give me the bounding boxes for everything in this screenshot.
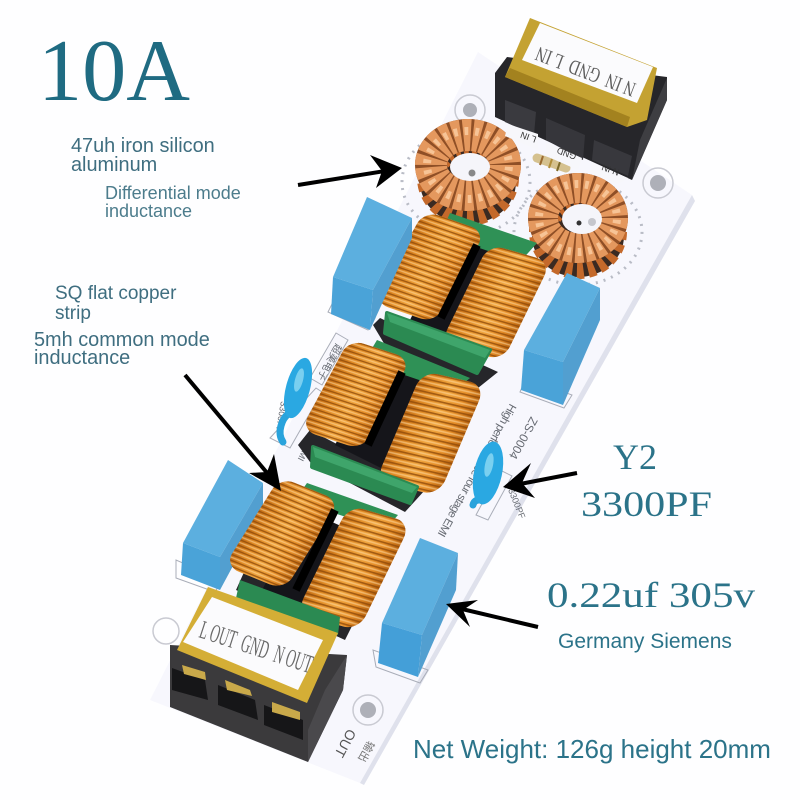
label: flat copper strip	[55, 283, 177, 324]
resistor	[537, 156, 566, 171]
label: Y2 3300PF: 3300PF	[581, 484, 712, 524]
label: iron silicon aluminum: aluminum	[71, 154, 157, 176]
Y2 capacitor: left	[278, 355, 318, 442]
label: weight and height: Net Weight: 126g height 20mm	[413, 734, 771, 764]
terminal label text	[519, 130, 621, 178]
printed outlines	[176, 302, 572, 683]
bottom terminal block	[170, 587, 347, 762]
board print text: ZS-0004	[506, 415, 541, 462]
label: flat copper strip: SQ flat copper	[55, 283, 177, 304]
label: brand: Germany Siemens	[558, 630, 732, 653]
terminal labels	[505, 124, 628, 184]
board print text: 3300PF	[506, 487, 527, 520]
label text: N IN GND L IN	[532, 42, 639, 102]
cover label	[522, 23, 653, 103]
inductor stage: bottom pair	[224, 477, 411, 640]
label: iron silicon aluminum: 47uh iron silicon	[71, 135, 215, 157]
label: Y2 3300PF	[581, 437, 712, 524]
cover label	[183, 597, 323, 690]
circuit board	[150, 52, 695, 785]
blue capacitor: lower left	[181, 460, 263, 590]
label text: L OUT GND N OUT	[196, 615, 316, 679]
arrow: to toroid	[298, 155, 402, 188]
toroid inductor: rear right	[514, 179, 642, 285]
toroid inductor: front left	[402, 129, 530, 235]
label: common mode inductance: 5mh common mode	[34, 329, 210, 351]
terminal label text: GND	[555, 145, 578, 162]
label: differential mode inductance: inductance	[105, 201, 192, 221]
terminal cover	[505, 18, 657, 127]
Y2 capacitor: right	[468, 439, 508, 507]
label: Y2 3300PF: Y2	[613, 437, 657, 477]
board print text: 超美电子	[315, 342, 345, 383]
arrow: to film capacitor	[446, 600, 538, 627]
arrow: to common mode inductor	[185, 375, 281, 491]
inductor stage: top pair	[373, 210, 551, 388]
label: differential mode inductance: Differential mode	[105, 183, 241, 203]
label: film capacitor rating: 0.22uf 305v	[547, 575, 755, 615]
board print text: EMI	[296, 444, 312, 463]
label: iron silicon aluminum	[71, 135, 215, 176]
board print text: High performance four stage EMI	[435, 402, 518, 539]
board print text	[273, 342, 541, 765]
title: 10A	[38, 23, 190, 120]
blue capacitor: upper right	[521, 273, 600, 405]
board print text: OUT	[331, 727, 359, 761]
arrow: to Y2 capacitor	[503, 463, 577, 498]
label: common mode inductance: inductance	[34, 347, 130, 369]
label: differential mode inductance	[105, 183, 241, 221]
board print text: 3300PF	[273, 401, 289, 434]
top terminal block	[495, 18, 667, 184]
blue capacitor: upper left	[331, 197, 412, 330]
label: common mode inductance	[34, 329, 210, 369]
terminal label text: N IN	[600, 162, 621, 178]
blue capacitor: lower right	[378, 538, 458, 677]
inductor stage: middle pair	[298, 339, 486, 512]
board print text: 输出	[355, 739, 378, 765]
label: flat copper strip: strip	[55, 303, 91, 324]
mounting holes	[153, 95, 673, 725]
terminal label text: L IN	[519, 130, 538, 145]
terminal cover	[177, 587, 338, 703]
